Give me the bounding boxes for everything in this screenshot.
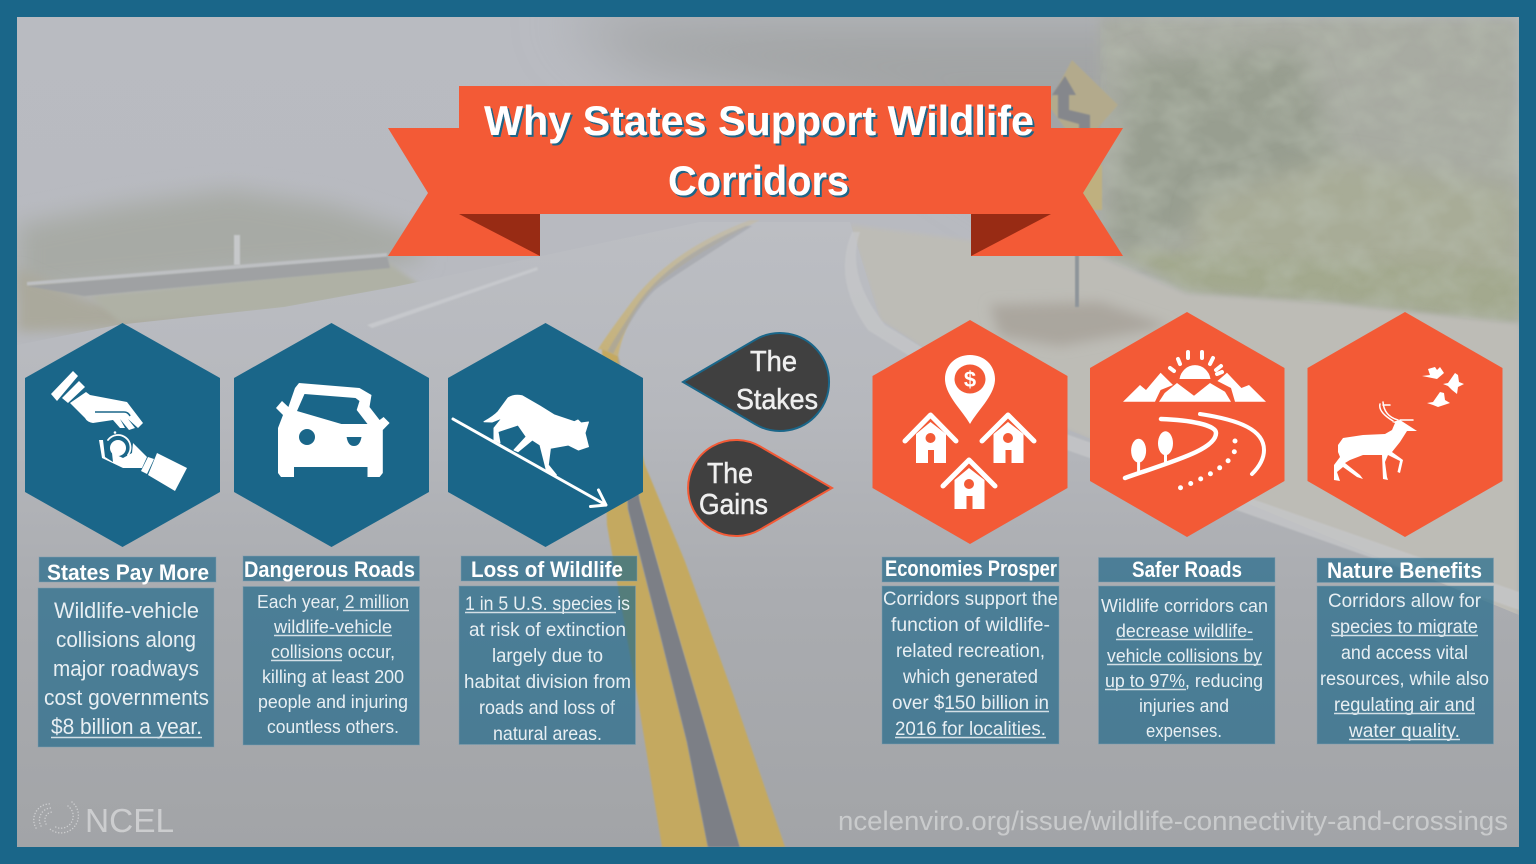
text block: dangerous roads: wildlife-vehicle xyxy=(273,616,392,637)
text block: states pay more: cost governments xyxy=(44,685,209,710)
panel: loss of wildlife xyxy=(448,323,643,745)
text block: economies prosper: function of wildlife- xyxy=(891,614,1050,636)
panel: states pay more xyxy=(25,323,220,747)
label: the stakes: Stakes xyxy=(736,384,818,416)
text block: economies prosper xyxy=(882,586,1059,744)
text block: nature benefits: resources, while also xyxy=(1320,668,1489,690)
text block: loss of wildlife: largely due to xyxy=(492,645,603,667)
label: the gains: Gains xyxy=(699,489,768,521)
heading: dangerous roads: Dangerous Roads xyxy=(244,557,415,582)
label: the gains xyxy=(688,440,832,536)
text block: states pay more: $8 billion a year. xyxy=(51,714,202,739)
hexagon icon: wolf on a downward slope xyxy=(448,323,643,547)
text block: safer roads: expenses. xyxy=(1146,720,1222,741)
heading: economies prosper: Economies Prosper xyxy=(885,556,1057,581)
heading: loss of wildlife: Loss of Wildlife xyxy=(471,557,623,582)
text block: safer roads: Wildlife corridors can xyxy=(1101,595,1268,616)
text block: nature benefits: regulating air and xyxy=(1334,694,1475,716)
hexagon icon: map pin and houses: $ xyxy=(964,367,976,392)
text block: nature benefits xyxy=(1317,586,1494,744)
text block: nature benefits: species to migrate xyxy=(1331,616,1478,638)
text block: nature benefits: Corridors allow for xyxy=(1328,590,1481,612)
hexagon icon: map pin and houses xyxy=(872,320,1068,544)
text block: economies prosper: Corridors support the xyxy=(883,588,1058,610)
text block: safer roads: decrease wildlife- xyxy=(1116,620,1253,641)
source url: ncelenviro.org/issue/wildlife-connectivity-and-crossings xyxy=(838,806,1508,836)
heading: nature benefits: Nature Benefits xyxy=(1327,558,1482,583)
text block: nature benefits: water quality. xyxy=(1348,720,1460,742)
text block: economies prosper: over $150 billion in xyxy=(892,692,1049,714)
text block: dangerous roads: people and injuring xyxy=(258,691,408,712)
panel: dangerous roads xyxy=(234,323,429,745)
title text xyxy=(484,97,1034,204)
logo: NCEL xyxy=(34,802,174,839)
text block: states pay more xyxy=(38,588,214,747)
text block: loss of wildlife: at risk of extinction xyxy=(469,619,626,641)
text block: nature benefits: and access vital xyxy=(1341,642,1468,664)
text block: economies prosper: which generated xyxy=(902,666,1038,688)
text block: safer roads xyxy=(1098,586,1275,744)
text block: dangerous roads xyxy=(243,586,420,745)
text block: economies prosper: related recreation, xyxy=(896,640,1045,662)
text block: economies prosper: 2016 for localities. xyxy=(895,718,1046,740)
panel: nature benefits xyxy=(1308,312,1502,744)
text block: states pay more: collisions along xyxy=(56,627,196,652)
title text: Why States Support Wildlife xyxy=(484,97,1034,144)
label: the stakes: The xyxy=(750,346,797,378)
text block: loss of wildlife: roads and loss of xyxy=(479,697,616,719)
hexagon icon: winding road and mountains xyxy=(1090,312,1284,537)
heading: states pay more: States Pay More xyxy=(47,560,209,585)
heading: safer roads: Safer Roads xyxy=(1132,557,1242,582)
text block: loss of wildlife: habitat division from xyxy=(464,671,631,693)
text block: loss of wildlife: natural areas. xyxy=(493,723,602,745)
logo: NCEL: NCEL xyxy=(85,802,174,839)
text block: safer roads: vehicle collisions by xyxy=(1107,645,1263,666)
label: the stakes xyxy=(683,333,829,431)
label: the gains: The xyxy=(707,458,753,490)
hexagon icon: money changing hands xyxy=(25,323,220,547)
text block: safer roads: injuries and xyxy=(1139,695,1229,716)
title banner xyxy=(388,86,1123,256)
text block: states pay more: Wildlife-vehicle xyxy=(54,598,199,623)
panel: economies prosper xyxy=(872,320,1068,744)
text block: dangerous roads: countless others. xyxy=(267,716,399,737)
text block: safer roads: up to 97%, reducing xyxy=(1105,670,1263,691)
text block: dangerous roads: collisions occur, xyxy=(271,641,395,662)
text block: loss of wildlife: 1 in 5 U.S. species is xyxy=(465,593,630,615)
text block: loss of wildlife xyxy=(459,586,636,745)
hexagon icon: deer and birds xyxy=(1308,312,1502,537)
title text: Corridors xyxy=(668,157,849,204)
text block: dangerous roads: killing at least 200 xyxy=(262,666,404,687)
panel: safer roads xyxy=(1090,312,1284,744)
hexagon icon: car xyxy=(234,323,429,547)
text block: states pay more: major roadways xyxy=(53,656,199,681)
text block: dangerous roads: Each year, 2 million xyxy=(257,591,409,612)
